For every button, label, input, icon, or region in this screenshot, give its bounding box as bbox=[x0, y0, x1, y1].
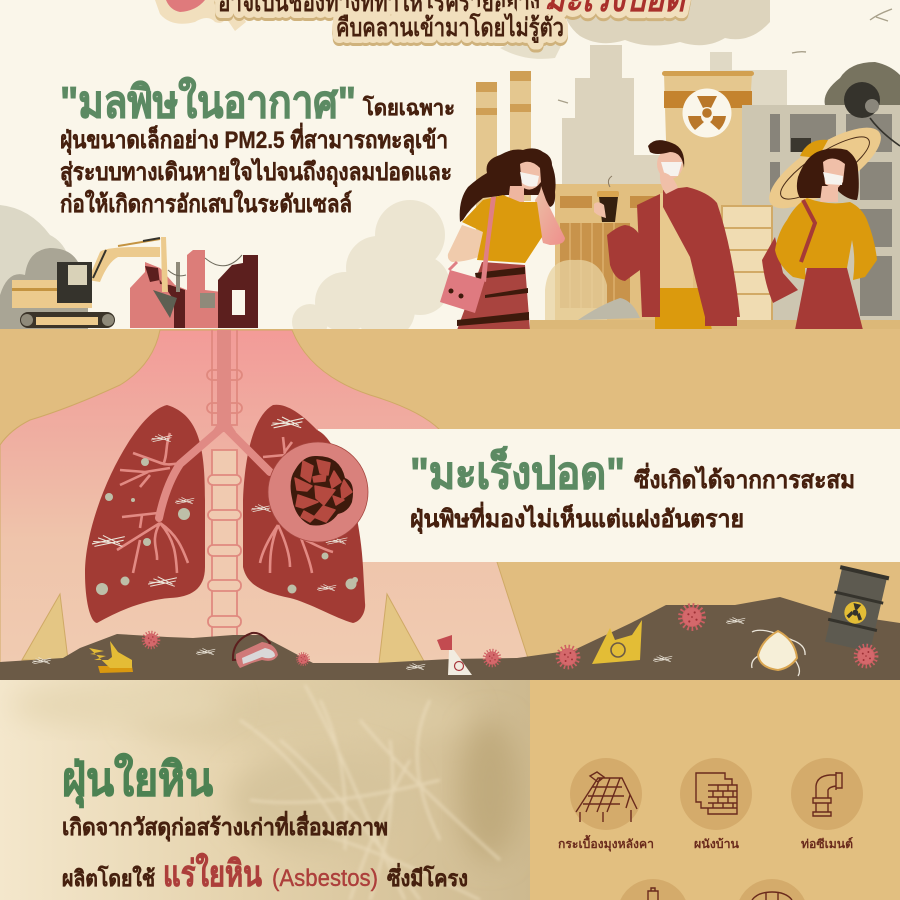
smoke clouds at top bbox=[500, 0, 770, 59]
distant grey tower bbox=[562, 45, 668, 190]
headline line 2: คืบคลานเข้ามาโดยไม่รู้ตัว bbox=[336, 12, 564, 44]
icon: yellow gloves bbox=[89, 641, 133, 673]
figure: man with coffee bbox=[594, 140, 740, 330]
tumour magnified circle bbox=[268, 442, 368, 542]
body text: สู่ระบบทางเดินหายใจไปจนถึงถุงลมปอดและ bbox=[60, 157, 452, 188]
icon: biohazard bag bbox=[592, 620, 642, 664]
icons: asbestos products bbox=[558, 758, 863, 900]
birds bbox=[558, 9, 892, 103]
virus particle bbox=[682, 607, 702, 627]
body text: ซึ่งเกิดได้จากการสะสม bbox=[634, 462, 855, 494]
factory building bbox=[545, 184, 755, 325]
term: asbestos mineral: แร่ใยหิน bbox=[163, 852, 262, 894]
demolished buildings bbox=[130, 250, 258, 328]
body text: ซึ่งมีโครง bbox=[387, 862, 468, 891]
item: further product, cut by the frame bbox=[620, 879, 686, 900]
item: cement pipe bbox=[791, 758, 863, 830]
body text: เกิดจากวัสดุก่อสร้างเก่าที่เสื่อมสภาพ bbox=[62, 810, 388, 842]
item: roof tiles bbox=[570, 758, 642, 830]
nuclear cooling tower with radiation symbol bbox=[662, 71, 765, 260]
panel: asbestos photo background bbox=[0, 680, 530, 900]
icon: goggles bbox=[233, 633, 278, 668]
rubble pile bbox=[578, 298, 640, 320]
body text: ฝุ่นขนาดเล็กอย่าง PM2.5 ที่สามารถทะลุเข้า bbox=[60, 122, 448, 156]
panel: asbestos products background bbox=[530, 680, 900, 900]
term: air pollution: "มลพิษในอากาศ" bbox=[60, 76, 356, 127]
ground under factory bbox=[530, 320, 900, 330]
headline: top banner bbox=[155, 0, 687, 44]
label: house wall: ผนังบ้าน bbox=[694, 837, 740, 851]
body text: ก่อให้เกิดการอักเสบในระดับเซลล์ bbox=[60, 189, 352, 218]
callout band: lung cancer bbox=[318, 429, 900, 562]
icon: radioactive barrel bbox=[823, 565, 889, 652]
distant grey block bbox=[710, 52, 787, 130]
icon: spray bottle bbox=[437, 635, 472, 675]
smoke cloud: left bbox=[0, 205, 89, 330]
body text: ฝุ่นพิษที่มองไม่เห็นแต่แฝงอันตราย bbox=[410, 501, 744, 535]
right lung bbox=[243, 405, 365, 623]
heading: asbestos dust: ฝุ่นใยหิน bbox=[62, 752, 213, 808]
icon: lung badge bbox=[155, 0, 246, 31]
label: roof tiles: กระเบื้องมุงหลังคา bbox=[558, 834, 654, 852]
left lung bbox=[85, 405, 205, 623]
panel: air pollution scene background bbox=[0, 0, 900, 330]
virus particle bbox=[144, 633, 158, 647]
spine bbox=[207, 330, 242, 640]
label: cement pipe: ท่อซีเมนต์ bbox=[801, 837, 853, 851]
text block: lung cancer bbox=[410, 446, 855, 535]
virus particle bbox=[485, 651, 499, 665]
smoke cloud: centre bbox=[292, 200, 450, 340]
panel: lung section background bbox=[0, 329, 900, 680]
ground mound bbox=[0, 597, 900, 680]
body text: โดยเฉพาะ bbox=[362, 95, 455, 120]
tan triangles bbox=[22, 594, 425, 663]
scaffolding bbox=[722, 206, 772, 322]
text block: air pollution bbox=[60, 76, 455, 218]
excavator bbox=[12, 237, 177, 328]
ground hazards bbox=[32, 565, 889, 676]
term: asbestos english: (Asbestos) bbox=[272, 865, 378, 892]
virus particle bbox=[559, 648, 577, 666]
icon: dust mask bbox=[752, 630, 805, 676]
virus particle bbox=[857, 647, 875, 665]
figure: woman with bag bbox=[440, 148, 565, 330]
trachea and bronchi bbox=[159, 330, 270, 518]
chimneys bbox=[476, 71, 531, 232]
text block: asbestos bbox=[62, 752, 468, 894]
item: further product, cut by the frame bbox=[739, 879, 805, 900]
figure: woman with sun hat bbox=[758, 113, 892, 330]
item: house wall bbox=[680, 758, 752, 830]
ruined grey building with wrecking ball bbox=[742, 62, 900, 325]
body silhouette bbox=[0, 330, 535, 680]
virus particle bbox=[298, 654, 308, 664]
term: lung cancer: "มะเร็งปอด" bbox=[410, 446, 625, 498]
body text: ผลิตโดยใช้ bbox=[62, 865, 155, 891]
dust fibres bbox=[32, 617, 745, 670]
